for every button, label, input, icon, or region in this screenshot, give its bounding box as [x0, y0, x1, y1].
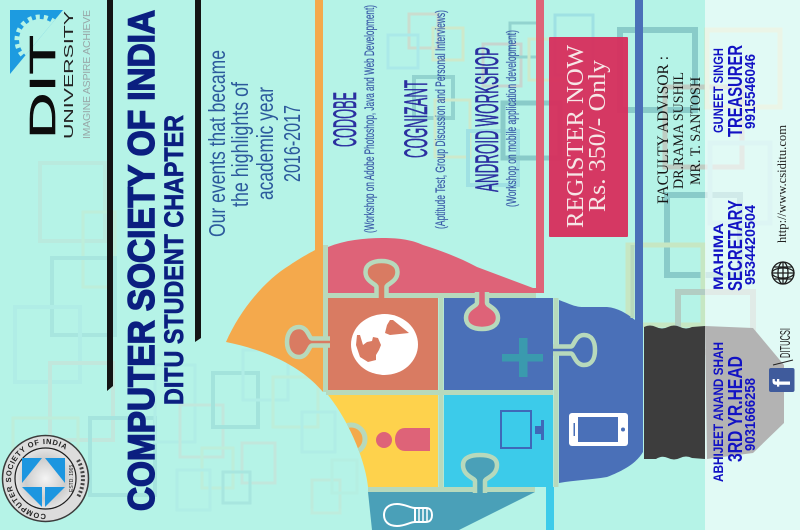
- logo: DIT University: [10, 10, 93, 139]
- tab: orange into yellow: [346, 422, 368, 453]
- piece: salmon with globe: [328, 298, 438, 390]
- facebook handle: DITUCSI: [777, 328, 794, 358]
- contact: head: [710, 342, 759, 482]
- icon: light bulb: [384, 504, 432, 526]
- text block: faculty advisors: DR.RAMA SUSHIL: [671, 72, 687, 189]
- tab: pink down: [466, 292, 498, 329]
- tab: salmon left: [287, 327, 330, 357]
- piece: orange: [226, 0, 323, 392]
- contact: head: 9031666258: [743, 378, 759, 451]
- contact: secretary: SECRETARY: [725, 200, 747, 291]
- piece: yellow with person: [328, 395, 438, 487]
- logo: Computer Society of India seal: ESTD. 1965: [69, 465, 75, 492]
- tab: blue right: [553, 335, 595, 365]
- icon: globe: [351, 314, 418, 375]
- callout: register now: REGISTER NOW: [563, 45, 589, 228]
- contact: secretary: 9534420504: [743, 205, 759, 285]
- icon: web globe: [772, 262, 794, 284]
- icon: plus: [502, 338, 543, 377]
- puzzle light bulb: [226, 0, 643, 530]
- icon: tablet: [501, 411, 544, 448]
- icon: facebook: [769, 368, 796, 392]
- event: Codobe: CODOBE: [327, 92, 363, 147]
- piece: teal with bulb: [368, 492, 535, 530]
- callout: register now: Rs. 350/- Only: [585, 60, 611, 212]
- contact: treasurer: GUNEET SINGH: [710, 48, 726, 133]
- event: Codobe: [327, 5, 377, 233]
- separators: [323, 245, 632, 490]
- text block: highlights intro: [204, 50, 305, 237]
- contact: head: ABHIJEET ANAND SHAH: [710, 342, 726, 482]
- socket: grey tip: [705, 326, 784, 459]
- piece: cyan with tablet: [444, 395, 553, 487]
- logo: DIT University: IMAGINE ASPIRE ACHIEVE: [81, 10, 93, 139]
- website url: http://www.csiditu.com: [775, 125, 789, 243]
- text block: faculty advisors: [655, 56, 704, 204]
- logo: DIT University: DIT: [22, 35, 63, 139]
- subtitle: DITU STUDENT CHAPTER: [159, 115, 189, 405]
- callout: register now: [549, 37, 628, 237]
- tab: salmon up: [366, 261, 398, 298]
- event: Cognizant: [398, 10, 448, 229]
- tab: teal up: [463, 455, 497, 493]
- icon: facebook: f: [769, 378, 796, 387]
- contact: secretary: [710, 200, 759, 291]
- text block: highlights intro: academic year: [252, 87, 278, 200]
- icon: person: [376, 428, 430, 451]
- socket: dark band: [644, 326, 705, 460]
- piece: pink: [328, 0, 544, 293]
- logo: Computer Society of India seal: COMPUTER SOCIETY OF INDIA: [6, 438, 66, 520]
- contact: secretary: MAHIMA: [710, 223, 726, 290]
- text block: highlights intro: 2016-2017: [279, 105, 305, 182]
- divider: black bars: [107, 0, 201, 391]
- piece: blue cap with phone: [559, 0, 643, 483]
- text block: highlights intro: the highlights of: [227, 82, 253, 207]
- logo: DIT University: UNIVERSITY: [61, 10, 76, 139]
- contact: head: 3RD YR.HEAD: [725, 356, 747, 462]
- contact: treasurer: 9915546046: [743, 54, 759, 129]
- facebook handle: [773, 328, 794, 365]
- contact: treasurer: TREASURER: [725, 45, 747, 137]
- piece: blue with plus: [444, 298, 553, 390]
- text block: faculty advisors: MR. T. SANTOSH: [688, 76, 704, 185]
- contact: treasurer: [710, 45, 759, 137]
- event: Android workshop: [469, 30, 519, 207]
- icon: phone: [569, 413, 628, 446]
- text block: faculty advisors: FACULTY ADVISOR :: [655, 56, 672, 204]
